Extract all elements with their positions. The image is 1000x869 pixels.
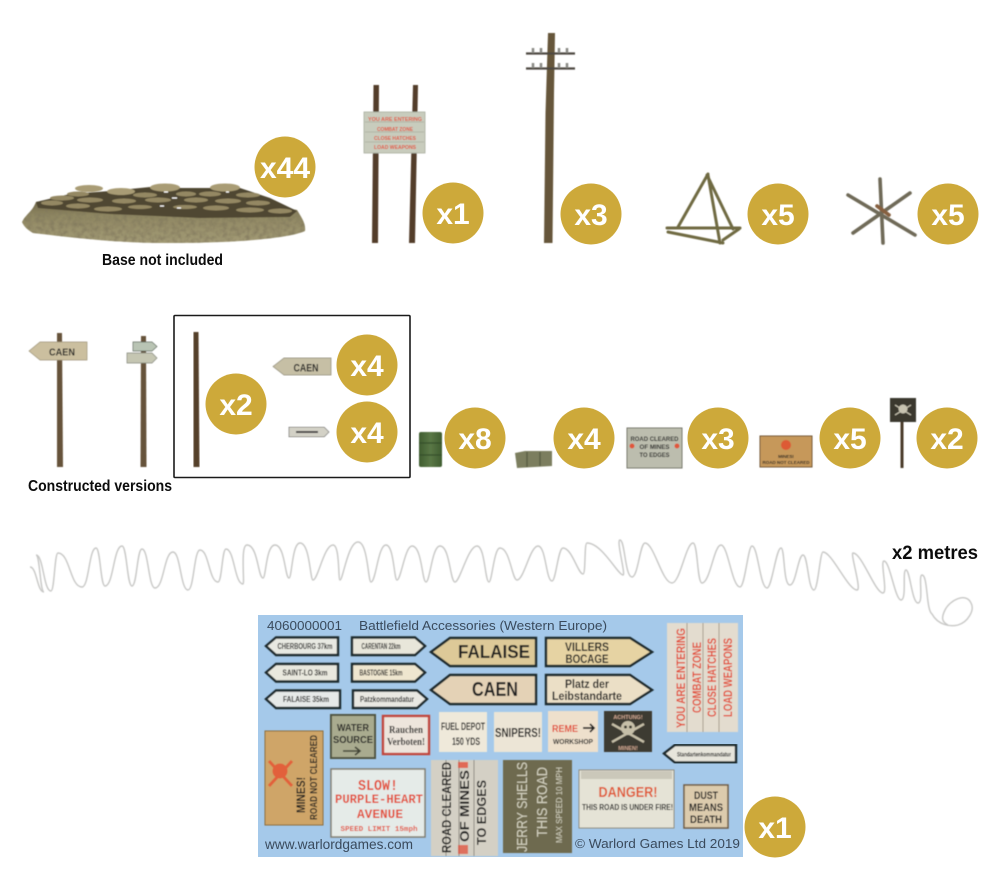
road cleared of mines sign: OF MINES [457, 770, 472, 842]
sheet code: 4060000001 [267, 619, 342, 633]
mines road not cleared sign: ROAD NOT CLEARED [309, 735, 320, 820]
badge: x5 mines boards [820, 408, 880, 468]
jerry shells this road sign: JERRY SHELLS [514, 762, 531, 852]
road cleared of mines sign: ROAD CLEARED [439, 762, 454, 853]
small direction signs: Patzkommandatur [360, 695, 414, 704]
danger sign [579, 770, 674, 828]
snipers sign: SNIPERS! [495, 725, 541, 740]
fuel depot sign: FUEL DEPOT [441, 721, 485, 733]
snipers sign [494, 712, 542, 752]
water source sign [331, 715, 375, 758]
badge: x1 decal sheet: x1 [758, 812, 792, 845]
badge: x3 pole [560, 184, 622, 244]
road cleared sign model: TO EDGES [640, 452, 670, 459]
two-post warning sign model: COMBAT ZONE [377, 127, 414, 133]
badge: x4 crates [554, 408, 614, 468]
constructed signpost: Caen [29, 333, 87, 467]
mines warning board model [760, 436, 812, 467]
large direction signs: CAEN [472, 679, 518, 701]
mines road not cleared sign: MINES! [294, 777, 308, 813]
copyright: © Warlord Games Ltd 2019 [575, 836, 740, 851]
badge: x8 drums: x8 [458, 423, 492, 456]
road cleared sign model: ROAD CLEARED [630, 436, 679, 443]
achtung skull sign: MINEN! [618, 746, 638, 752]
badge: x2 skull signs [916, 408, 978, 468]
two-post warning sign model: YOU ARE ENTERING [368, 117, 422, 123]
slow purple-heart avenue sign: SLOW! [358, 778, 398, 795]
danger sign: THIS ROAD IS UNDER FIRE! [582, 802, 673, 812]
you are entering sign: COMBAT ZONE [690, 642, 704, 713]
you are entering sign: CLOSE HATCHES [705, 638, 719, 717]
caption: base not included: Base not included [102, 252, 223, 269]
badge: x5 tripod [748, 184, 808, 244]
you are entering sign: LOAD WEAPONS [721, 638, 735, 717]
dust means death sign: DUST [694, 790, 718, 802]
badge: x2 posts: x2 [219, 389, 253, 422]
badge: x4 crates: x4 [567, 423, 601, 456]
achtung skull sign: ACHTUNG! [613, 715, 643, 721]
badge: x5 mines boards: x5 [833, 423, 867, 456]
large direction signs: VILLERS [565, 642, 609, 654]
small direction signs: BASTOGNE 15km [360, 668, 402, 678]
badge: x8 drums [444, 408, 506, 468]
part: Caen board [273, 358, 331, 375]
badge: x1 sign [422, 182, 484, 244]
fuel depot sign: 150 YDS [452, 736, 480, 748]
badge: x5 hedgehog [918, 184, 978, 244]
constructed signpost: Caen: CAEN [49, 348, 75, 358]
badge: x5 hedgehog: x5 [931, 199, 965, 232]
jerry shells this road sign [503, 760, 572, 853]
small direction signs: CARENTAN 22km [362, 642, 400, 651]
badge: x4 Caen boards [336, 334, 398, 396]
constructed signpost: two small boards [127, 336, 157, 467]
road cleared of mines sign [431, 760, 498, 856]
badge: x44: x44 [260, 152, 310, 185]
caption: constructed versions: Constructed versions [28, 478, 172, 495]
large direction signs: Leibstandarte [552, 691, 622, 703]
mines warning board model: ROAD NOT CLEARED [762, 460, 810, 465]
dust means death sign [684, 785, 728, 828]
reme workshop sign [548, 711, 598, 752]
large direction signs [431, 638, 652, 704]
website url: www.warlordgames.com [264, 836, 413, 852]
road cleared sign model: OF MINES [640, 444, 670, 451]
you are entering sign: YOU ARE ENTERING [674, 628, 688, 728]
rauchen verboten sign: Verboten! [387, 736, 425, 748]
mines warning board model: MINES! [778, 454, 794, 459]
dust means death sign: DEATH [690, 814, 722, 826]
badge: x4 small boards: x4 [350, 417, 384, 450]
badge: x4 Caen boards: x4 [350, 350, 384, 383]
standartenkommandatur sign [664, 745, 736, 762]
water source sign: WATER [337, 722, 369, 734]
rauchen verboten sign: Rauchen [389, 724, 423, 736]
water source sign: SOURCE [333, 734, 373, 746]
dust means death sign: MEANS [689, 802, 723, 814]
part: Caen board: CAEN [294, 362, 319, 374]
small direction signs [266, 638, 427, 708]
badge: x1 sign: x1 [436, 198, 470, 231]
reme workshop sign: WORKSHOP [553, 737, 593, 746]
part: small board [289, 427, 329, 437]
road cleared sign model [627, 428, 682, 468]
large direction signs: Platz der [565, 679, 609, 691]
two-post warning sign model: LOAD WEAPONS [374, 145, 417, 151]
rauchen verboten sign [383, 716, 429, 754]
badge: x5 tripod: x5 [761, 199, 795, 232]
label: wire length: x2 metres [892, 543, 978, 564]
badge: x4 small boards [336, 402, 398, 462]
badge: x1 decal sheet [744, 796, 806, 858]
part: bare post [194, 332, 200, 467]
badge: x3 road signs [688, 408, 748, 468]
fuel depot sign [439, 712, 487, 752]
badge: x44 [254, 136, 316, 198]
standartenkommandatur sign: Standartenkommandatur [677, 752, 731, 758]
tripod obstacle model [667, 174, 740, 243]
danger sign: DANGER! [598, 784, 658, 801]
two-post warning sign model: CLOSE HATCHES [374, 136, 417, 142]
jerry shells this road sign: THIS ROAD [534, 767, 551, 837]
slow purple-heart avenue sign: SPEED LIMIT 15mph [340, 826, 418, 834]
small direction signs: FALAISE 35km [283, 695, 329, 704]
large direction signs: BOCAGE [566, 654, 609, 666]
badge: x3 pole: x3 [574, 199, 608, 232]
two-post warning sign model [364, 85, 425, 243]
road cleared of mines sign: TO EDGES [474, 780, 489, 845]
sheet title: Battlefield Accessories (Western Europe) [359, 618, 607, 633]
reme workshop sign: REME [552, 723, 578, 735]
barbed wire coil [30, 540, 972, 626]
ammo crate model [515, 451, 552, 468]
slow purple-heart avenue sign: AVENUE [357, 807, 403, 822]
you are entering sign [667, 623, 738, 732]
slow purple-heart avenue sign [331, 769, 425, 837]
mines road not cleared sign [265, 731, 323, 825]
panel: sign parts box [174, 316, 410, 478]
oil drum model [419, 432, 442, 467]
badge: x3 road signs: x3 [701, 423, 735, 456]
achtung skull sign [604, 711, 652, 752]
badge: x2 skull signs: x2 [930, 423, 964, 456]
large direction signs: FALAISE [458, 642, 530, 662]
czech hedgehog model [848, 179, 915, 243]
badge: x2 posts [206, 374, 266, 434]
slow purple-heart avenue sign: PURPLE-HEART [335, 792, 423, 807]
small direction signs: SAINT-LO 3km [282, 668, 328, 678]
small direction signs: CHERBOURG 37km [278, 642, 332, 651]
jerry shells this road sign: MAX SPEED 10 MPH [555, 767, 564, 843]
sandbag emplacement model [22, 184, 305, 243]
telegraph pole model [526, 33, 575, 243]
skull sign model [890, 398, 916, 468]
panel: decal sheet [258, 615, 743, 857]
